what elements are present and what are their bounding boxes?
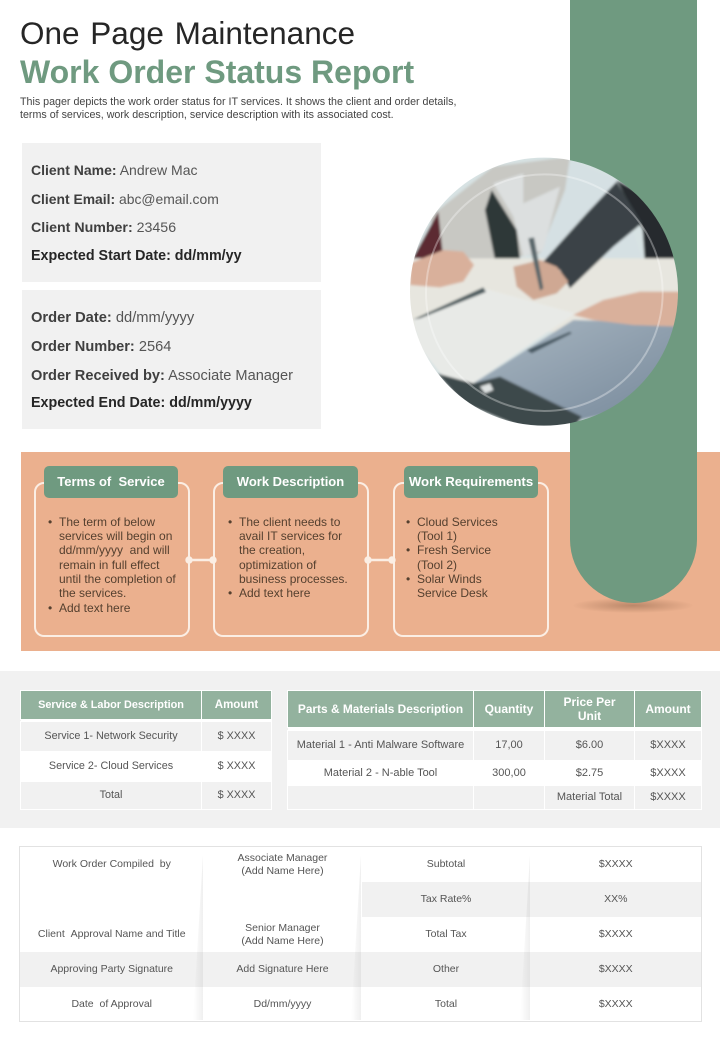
text: work requirements list: Fresh Service xyxy=(417,543,491,557)
heading: work description xyxy=(223,466,358,498)
pill shadow xyxy=(573,598,693,613)
client name: Client Name: Andrew Mac xyxy=(31,162,198,178)
text: terms of service list: Add text here xyxy=(59,601,130,615)
panel: client details xyxy=(22,143,321,282)
table: parts and materials: Parts & Materials Description xyxy=(298,702,463,716)
order received by: Order Received by: Associate Manager xyxy=(31,368,293,384)
text: work requirements list: (Tool 2) xyxy=(417,558,457,572)
table: approval and totals: Tax Rate% xyxy=(421,893,471,905)
intro text: terms of services, work description, service description with its associated cost. xyxy=(20,109,394,121)
client email: Client Email: abc@email.com xyxy=(31,191,219,207)
green vertical pill xyxy=(570,0,697,603)
table: service and labor: Service & Labor Description xyxy=(38,699,184,711)
ring xyxy=(426,174,663,411)
connector: description to requirements xyxy=(364,556,396,564)
text: work description list: Add text here xyxy=(239,586,310,600)
table: approval and totals: Associate Manager xyxy=(238,852,327,864)
column shadows xyxy=(198,860,530,1020)
order number: Order Number: 2564 xyxy=(31,339,171,355)
table: service and labor: $ XXXX xyxy=(218,730,255,742)
table: parts and materials: Price Per xyxy=(563,695,616,709)
table: approval and totals: Total xyxy=(435,998,457,1010)
heading: terms of service: Terms of Service xyxy=(57,474,165,489)
table: approval and totals: (Add Name Here) xyxy=(241,934,324,946)
table: approval and totals: Other xyxy=(433,963,459,975)
text: terms of service list: remain in full effect xyxy=(59,558,160,572)
text: terms of service list: until the completion of xyxy=(59,572,176,586)
intro text: This pager depicts the work order status for IT services. It shows the client and order details, xyxy=(20,96,456,108)
panel: work requirements xyxy=(393,482,549,637)
table: approval and totals xyxy=(19,846,702,1022)
table: parts and materials xyxy=(287,690,702,810)
order date: Order Date: dd/mm/yyyy xyxy=(31,310,194,326)
connector: terms to description xyxy=(185,556,217,564)
text: work requirements list: Service Desk xyxy=(417,586,488,600)
text: terms of service list: services will begin on xyxy=(59,529,172,543)
text: work requirements list: Solar Winds xyxy=(417,572,482,586)
table: parts and materials: $XXXX xyxy=(650,739,686,751)
panel: work description xyxy=(213,482,369,637)
table: approval and totals: $XXXX xyxy=(599,858,633,870)
table: parts and materials: 17,00 xyxy=(495,739,523,751)
text: work description list: The client needs to xyxy=(239,514,340,528)
table: parts and materials: $XXXX xyxy=(650,791,686,803)
text: work description list: business processes. xyxy=(239,572,348,586)
table: approval and totals: Approving Party Signature xyxy=(50,963,173,975)
heading: terms of service xyxy=(44,466,178,498)
text: work description list: the creation, xyxy=(239,543,305,557)
title line 2: Work Order Status Report xyxy=(20,54,414,90)
panel: peach services band xyxy=(21,452,720,651)
table: approval and totals: Subtotal xyxy=(427,858,465,870)
table: service and labor: Amount xyxy=(215,699,258,711)
text: terms of service list: the services. xyxy=(59,586,126,600)
text: • xyxy=(48,601,52,615)
panel: grey tables band xyxy=(0,671,720,828)
text: • xyxy=(406,543,410,557)
text: terms of service list: dd/mm/yyyy and will xyxy=(59,543,170,557)
table: service and labor: Total xyxy=(100,789,122,801)
text: • xyxy=(48,514,52,528)
table: approval and totals: $XXXX xyxy=(599,928,633,940)
intro text xyxy=(20,96,456,121)
table: service and labor: Service 1- Network Security xyxy=(44,730,178,742)
text: work requirements list: Cloud Services xyxy=(417,514,498,528)
table: approval and totals: $XXXX xyxy=(599,963,633,975)
heading: work description: Work Description xyxy=(237,474,344,489)
table: parts and materials: Material 1 - Anti Malware Software xyxy=(297,739,464,751)
photo: business people signing document xyxy=(410,158,678,426)
table: parts and materials: $XXXX xyxy=(650,766,686,778)
table: parts and materials: Quantity xyxy=(485,702,533,716)
text: • xyxy=(406,514,410,528)
heading: work requirements xyxy=(404,466,538,498)
table: approval and totals: Client Approval Name and Title xyxy=(38,928,186,940)
table: approval and totals: Date of Approval xyxy=(71,998,152,1010)
table: service and labor xyxy=(20,690,272,810)
text: work requirements list xyxy=(406,514,498,600)
title line 1: One Page Maintenance xyxy=(20,15,355,51)
text: work requirements list: (Tool 1) xyxy=(417,529,457,543)
table: parts and materials: $6.00 xyxy=(576,739,603,751)
text: work description list: avail IT services for xyxy=(239,529,342,543)
client number: Client Number: 23456 xyxy=(31,220,176,236)
text: work description list: optimization of xyxy=(239,558,316,572)
table: approval and totals: XX% xyxy=(604,893,627,905)
text: • xyxy=(228,514,232,528)
table: approval and totals: Work Order Compiled by xyxy=(53,858,171,870)
text: terms of service list: The term of below xyxy=(59,514,155,528)
table: service and labor: $ XXXX xyxy=(218,760,255,772)
table: parts and materials: Amount xyxy=(645,702,691,716)
panel: order details xyxy=(22,290,321,429)
table: service and labor: $ XXXX xyxy=(218,789,255,801)
table: approval and totals: Dd/mm/yyyy xyxy=(254,998,311,1010)
table: parts and materials: Material Total xyxy=(557,791,622,803)
expected start date: Expected Start Date: dd/mm/yy xyxy=(31,248,242,264)
table: approval and totals: Add Signature Here xyxy=(236,963,329,975)
table: approval and totals: $XXXX xyxy=(599,998,633,1010)
text: work description list xyxy=(228,514,348,600)
table: parts and materials: $2.75 xyxy=(576,766,603,778)
table: service and labor: Service 2- Cloud Services xyxy=(49,760,173,772)
expected end date: Expected End Date: dd/mm/yyyy xyxy=(31,395,252,411)
heading: work requirements: Work Requirements xyxy=(409,474,533,489)
table: approval and totals: (Add Name Here) xyxy=(241,864,324,876)
table: parts and materials: 300,00 xyxy=(492,766,526,778)
text: • xyxy=(406,572,410,586)
table: parts and materials: Material 2 - N-able Tool xyxy=(324,766,437,778)
text: terms of service list xyxy=(48,514,176,615)
panel: terms of service xyxy=(34,482,190,637)
table: approval and totals: Total Tax xyxy=(425,928,467,940)
table: parts and materials: Unit xyxy=(578,709,601,723)
table: approval and totals: Senior Manager xyxy=(245,922,320,934)
text: • xyxy=(228,586,232,600)
title xyxy=(20,15,414,90)
